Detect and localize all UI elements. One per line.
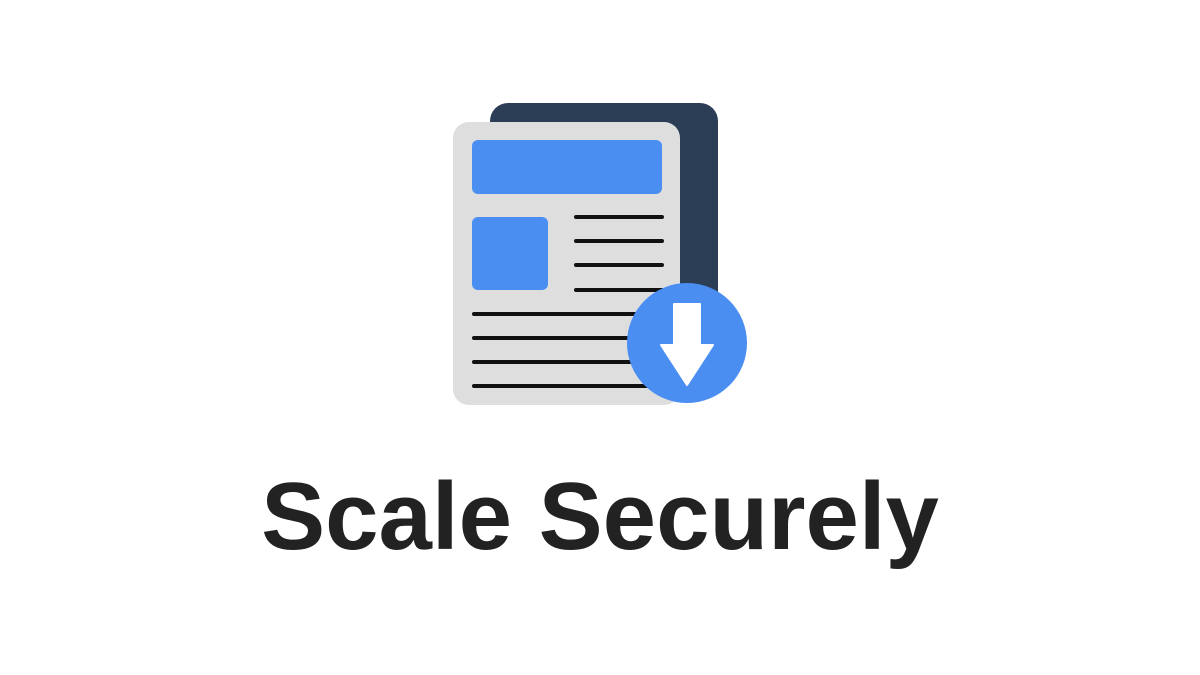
download badge bbox=[627, 283, 747, 403]
front page bbox=[453, 122, 680, 405]
back page bbox=[490, 103, 718, 383]
title: Scale Securely bbox=[261, 463, 939, 570]
